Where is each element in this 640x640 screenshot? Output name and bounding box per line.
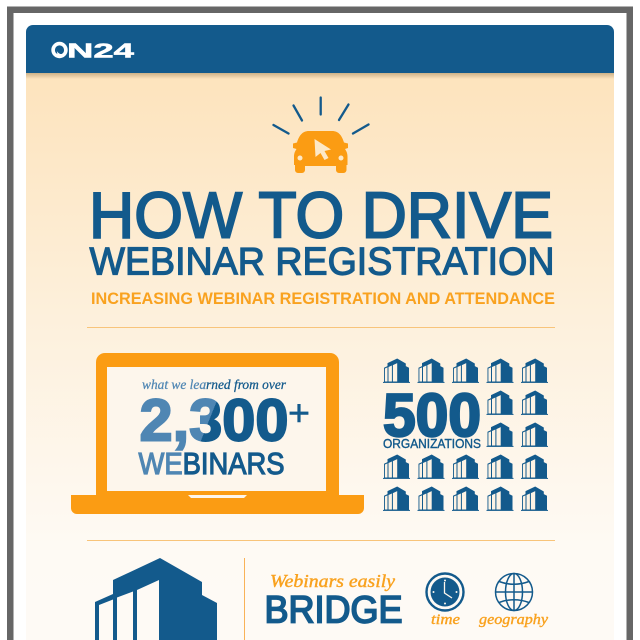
text: webinars easily bridge: Webinars easily: [270, 571, 395, 591]
title: [89, 178, 554, 284]
logo: ON24: N24: [67, 40, 136, 62]
laptop screen text: +: [288, 392, 310, 433]
label: geography: geography: [479, 612, 548, 628]
icon: car with cursor and rays: [274, 98, 368, 173]
laptop graphic: [71, 353, 364, 514]
rays: [274, 98, 368, 134]
icon: large building: [95, 558, 217, 640]
icon: clock: [426, 574, 464, 610]
stat: 500 organizations: ORGANIZATIONS: [383, 436, 481, 451]
label: time: time: [431, 612, 460, 628]
icon: globe: [496, 574, 532, 610]
text: webinars easily bridge: [264, 571, 402, 632]
laptop screen text: WEBINARS: [138, 446, 284, 481]
header bar: [26, 25, 614, 79]
laptop screen text: what we learned from over: [142, 377, 287, 392]
title: WEBINAR REGISTRATION: [90, 240, 554, 284]
subtitle: INCREASING WEBINAR REGISTRATION AND ATTENDANCE: [91, 290, 555, 308]
text: webinars easily bridge: BRIDGE: [264, 590, 402, 632]
stat: 500 organizations: 500: [383, 382, 481, 449]
laptop screen text: 2,300: [140, 388, 288, 454]
car body: [293, 131, 348, 173]
title: HOW TO DRIVE: [89, 178, 553, 252]
laptop screen text: [138, 377, 310, 481]
cursor: [314, 139, 331, 160]
building grid icons: [383, 358, 548, 511]
logo: ON24: [53, 40, 136, 62]
